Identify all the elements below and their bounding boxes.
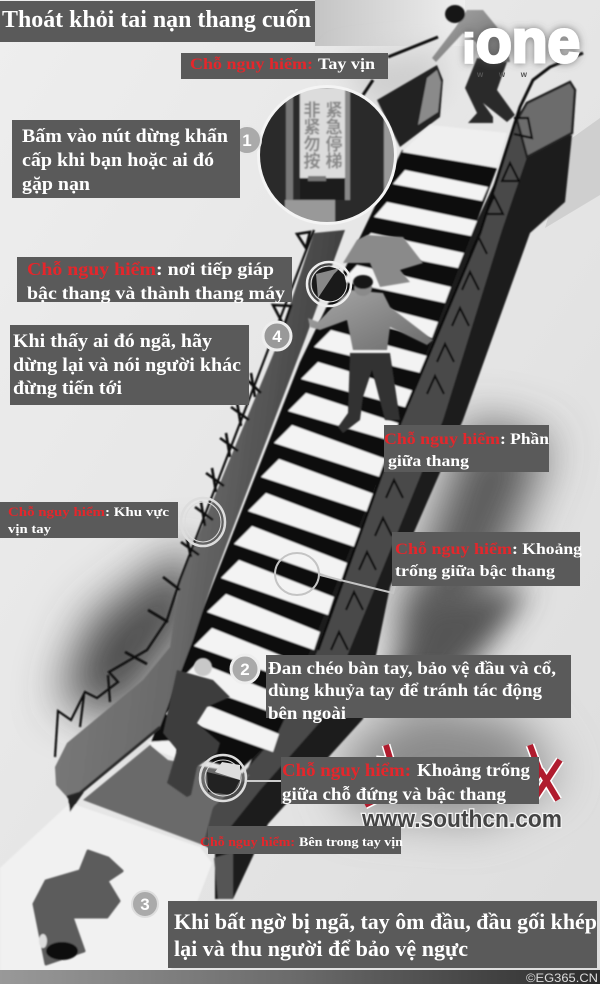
sign text: 停 (326, 130, 342, 155)
callout: danger handrail area (0, 502, 178, 538)
callout: danger handrail (181, 53, 388, 79)
title (0, 1, 315, 42)
sign text: 紧 (304, 113, 320, 138)
number badge 3: 3 (140, 895, 150, 914)
callout: danger gap at landing: giữa chỗ đứng và bậc thang (282, 784, 506, 804)
sign text: 急 (326, 113, 342, 138)
logo: southcn red calligraphy and url: www.southcn.com (361, 806, 562, 833)
callout: danger step edge: bậc thang và thành thang máy (27, 283, 285, 303)
escalator steps (147, 170, 488, 758)
step 1 text panel: gặp nạn (22, 174, 90, 195)
right handrail line (318, 53, 583, 650)
right balustrade hatch panel (200, 107, 527, 850)
callout: danger step edge: Chỗ nguy hiểm (27, 259, 156, 279)
step 3 text panel (168, 901, 597, 968)
callout: danger gap at landing: Chỗ nguy hiểm: (282, 760, 411, 780)
logo: iOne watermark: i (462, 25, 476, 72)
number badge 2: 2 (240, 660, 250, 679)
callout: danger gap between steps: Chỗ nguy hiểm (395, 541, 513, 558)
top landing (402, 125, 507, 168)
left balustrade band (55, 230, 345, 797)
step 1 text panel: cấp khi bạn hoặc ai đó (22, 150, 214, 171)
danger ring: gap at landing, with connector (200, 755, 282, 801)
footer strip (0, 970, 600, 984)
man at top (432, 5, 515, 123)
step 4 text panel: đừng tiến tới (13, 378, 122, 399)
number badge 1 (233, 126, 261, 154)
crouching man in suit (163, 658, 230, 797)
callout: danger step edge: : nơi tiếp giáp (156, 259, 274, 279)
danger ring: step edge (307, 262, 351, 306)
step 4 text panel: Khi thấy ai đó ngã, hãy (13, 331, 213, 352)
callout: danger inside handrail (200, 826, 403, 854)
callout: danger gap at landing (281, 757, 539, 804)
number badge 4: 4 (272, 327, 282, 346)
logo url letters: www (476, 70, 528, 79)
callout: danger middle of escalator: : Phần (500, 431, 549, 448)
inset circle: emergency stop button (257, 85, 398, 225)
callout: danger handrail: Tay vịn (318, 56, 375, 73)
top handrail line (363, 37, 438, 95)
right hooks (331, 118, 532, 650)
callout: danger inside handrail: Chỗ nguy hiểm: (200, 835, 295, 849)
callout: danger middle of escalator: Chỗ nguy hiểm (384, 431, 501, 448)
kneeling man (343, 235, 423, 287)
white floor (0, 803, 212, 972)
callout: danger handrail area: Chỗ nguy hiểm (8, 504, 105, 519)
callout: danger handrail area: : Khu vực (105, 504, 169, 519)
sign text: 按 (304, 147, 320, 172)
steps underlay (150, 150, 497, 770)
figures (34, 5, 515, 964)
step 2 text panel: dùng khuỷa tay để tránh tác động (268, 680, 542, 700)
callout: danger gap between steps: : Khoảng (512, 541, 582, 558)
sign text (304, 96, 342, 172)
sign text: 梯 (326, 147, 342, 172)
callout: danger handrail area: vịn tay (8, 521, 52, 536)
left glass highlight (418, 70, 441, 125)
sign text: 非 (304, 96, 320, 121)
logo: iOne watermark: one (476, 8, 580, 75)
step 4 text panel (10, 325, 249, 405)
escalator pillar (214, 852, 233, 899)
number badge 3 (132, 891, 158, 917)
callout: danger middle of escalator: giữa thang (388, 453, 469, 470)
danger ring: handrail area (181, 498, 225, 546)
callout: danger gap at landing: Khoảng trống (417, 760, 530, 780)
curled man on floor (34, 851, 122, 964)
step 2 text panel: Đan chéo bàn tay, bảo vệ đầu và cổ, (268, 658, 556, 678)
title: Thoát khỏi tai nạn thang cuốn (2, 7, 311, 33)
callout: danger gap between steps: trống giữa bậc thang (395, 563, 555, 580)
callout: danger handrail: Chỗ nguy hiểm: (190, 56, 313, 73)
logo: southcn red calligraphy and url (361, 745, 562, 833)
right top balustrade glass (517, 82, 575, 157)
standing man (308, 275, 433, 433)
step 4 text panel: dừng lại và nói người khác (13, 355, 241, 376)
step 3 text panel: lại và thu người để bảo vệ ngực (174, 936, 468, 961)
callout: danger middle of escalator (384, 425, 549, 472)
sign text: 紧 (326, 96, 342, 121)
left handrail line (55, 230, 314, 757)
callout: danger inside handrail: Bên trong tay vịn (299, 835, 403, 849)
left top balustrade glass (377, 65, 443, 147)
step 3 text panel: Khi bất ngờ bị ngã, tay ôm đầu, đầu gối khép (174, 909, 597, 934)
step 2 text panel (266, 655, 571, 723)
bottom spike (68, 792, 84, 812)
escalator outer wall (215, 135, 572, 899)
step 2 text panel: bên ngoài (268, 703, 346, 723)
bottom dark landing plate (83, 745, 250, 845)
number badge 4 (263, 322, 291, 350)
number badge 2 (231, 655, 259, 683)
band lower rim (67, 727, 160, 797)
number badge 1: 1 (242, 131, 252, 150)
left hooks (125, 232, 310, 664)
step 1 text panel: Bấm vào nút dừng khẩn (22, 126, 228, 147)
danger ring: gap between steps, with connector (275, 553, 396, 595)
callout: danger step edge (17, 257, 292, 303)
callout: danger gap between steps (392, 532, 582, 586)
sign text: 勿 (304, 130, 320, 155)
step 1 text panel (12, 120, 240, 198)
